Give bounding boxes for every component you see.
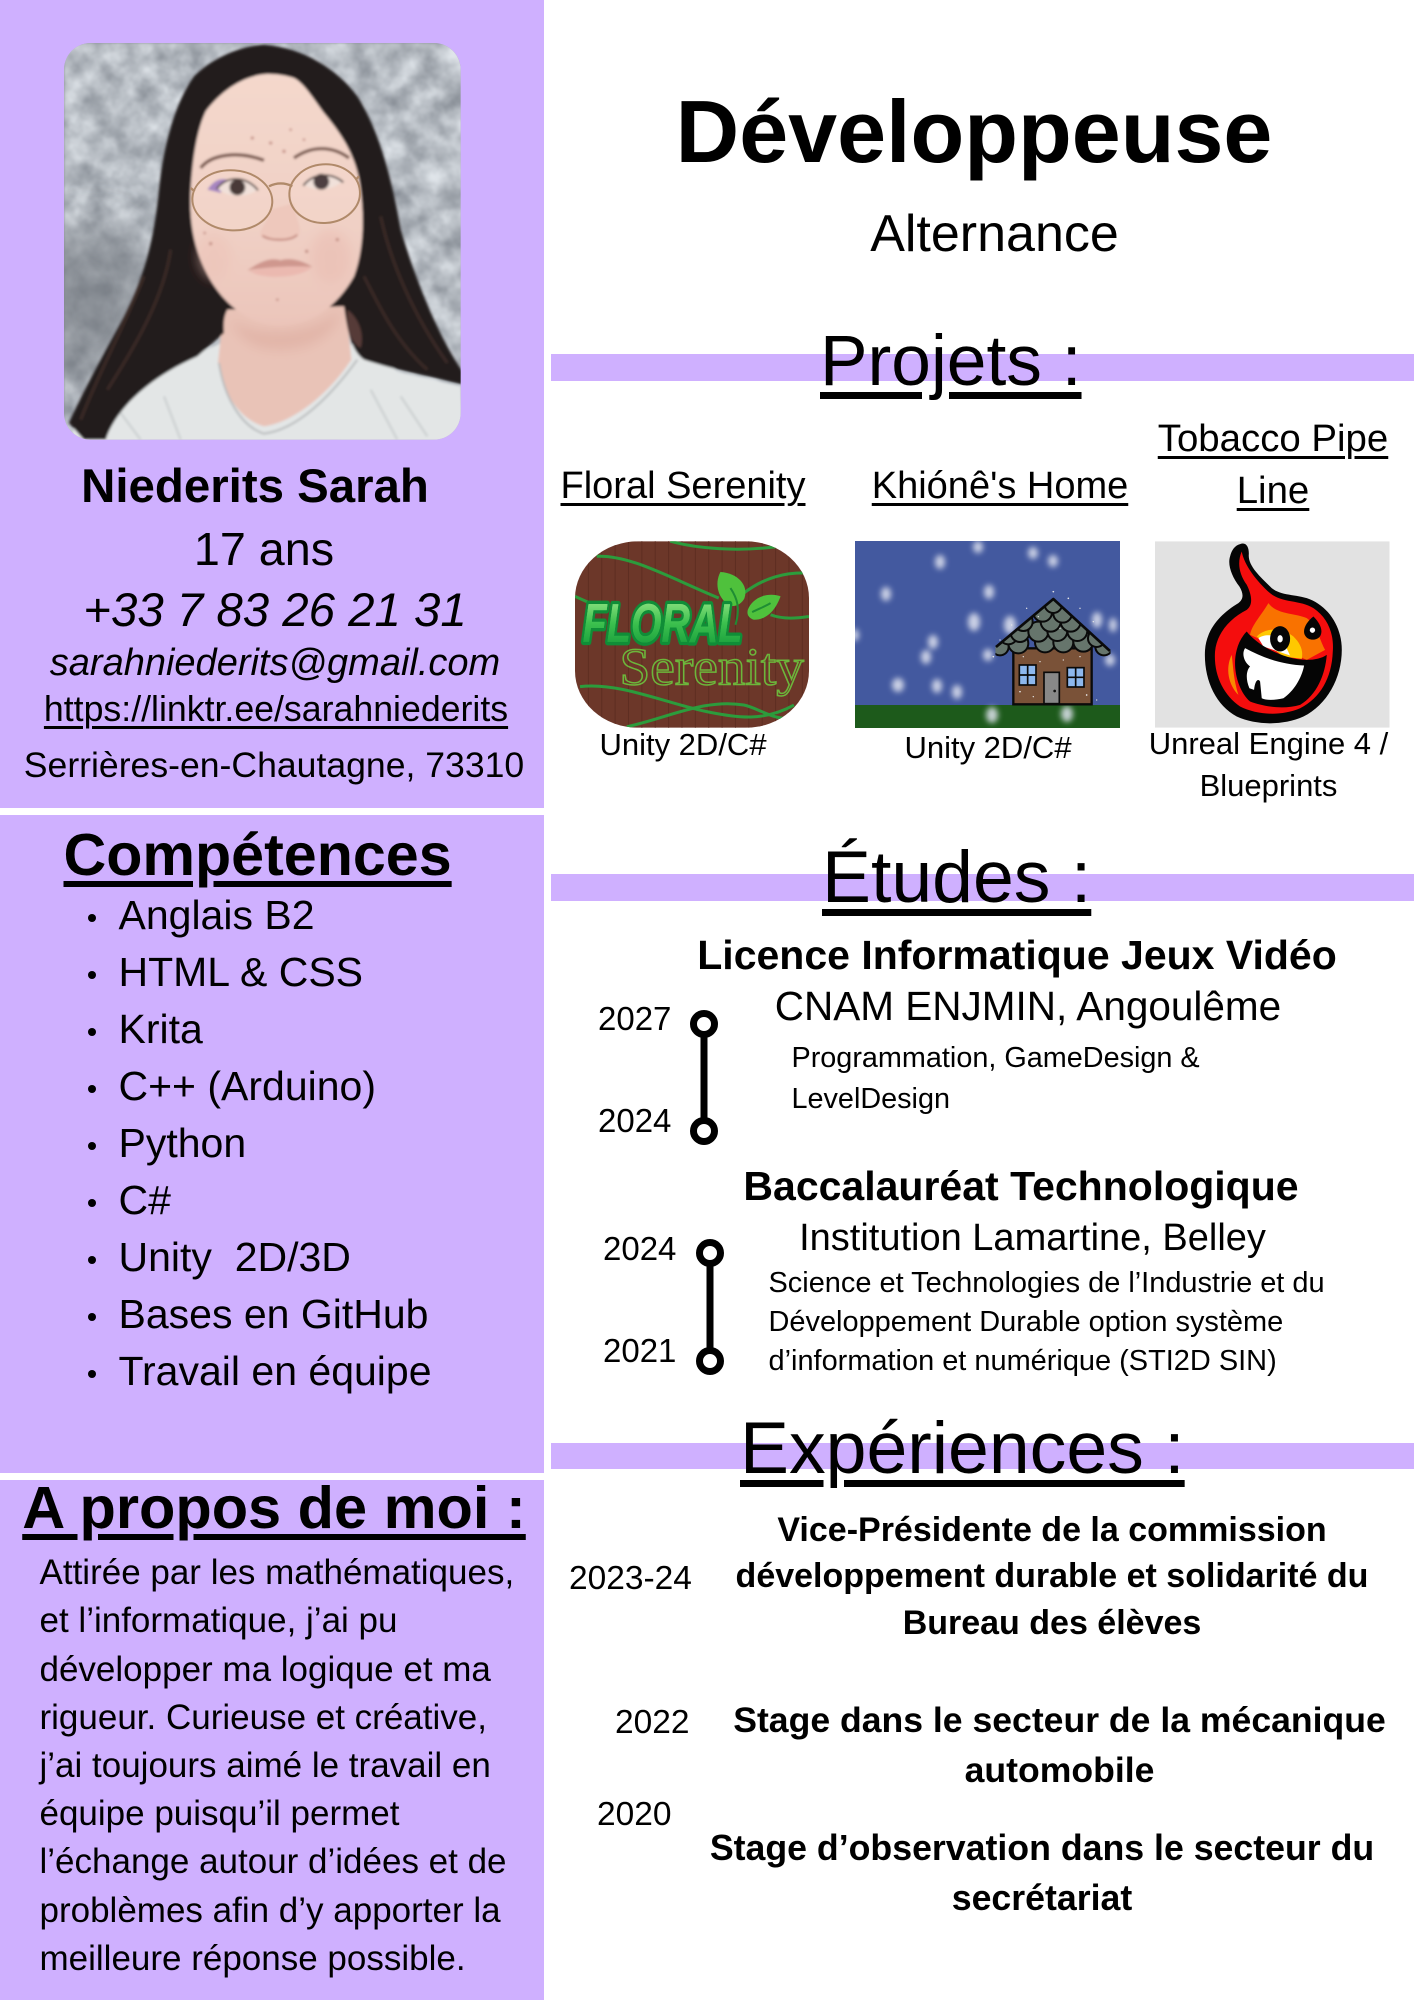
list: skills: C# <box>118 1177 171 1223</box>
experience: vice-presidente: Vice-Présidente de la commission <box>777 1511 1327 1549</box>
text: about: j’ai toujours aimé le travail en <box>40 1746 491 1785</box>
windows <box>1019 665 1084 687</box>
freckles <box>203 128 339 301</box>
header <box>676 82 1272 263</box>
experience: vice-presidente <box>736 1511 1368 1642</box>
section: projects <box>551 321 1414 803</box>
year: 2021: 2021 <box>603 1332 676 1369</box>
address: Serrières-en-Chautagne, 73310 <box>24 745 524 785</box>
text: about: l’échange autour d’idées et de <box>40 1842 507 1881</box>
image: Floral Serenity logo: Serenity <box>619 638 805 696</box>
heading: experiences: Expériences : <box>740 1407 1185 1489</box>
heading: about: A propos de moi : <box>22 1474 526 1541</box>
nose <box>263 206 298 236</box>
year: 2024: 2024 <box>603 1230 676 1267</box>
experience: stage mecanique: automobile <box>965 1750 1154 1790</box>
roof scales <box>995 600 1111 656</box>
list: skills: Krita <box>118 1006 203 1052</box>
title: Développeuse <box>676 82 1272 181</box>
experience: stage mecanique: Stage dans le secteur de la mécanique <box>733 1700 1386 1740</box>
text: about: développer ma logique et ma <box>40 1650 491 1689</box>
subtitle: Alternance <box>870 205 1119 263</box>
chin shadow <box>242 322 331 348</box>
school: CNAM ENJMIN: CNAM ENJMIN, Angoulême <box>775 983 1281 1029</box>
text: about: et l’informatique, j’ai pu <box>40 1601 397 1640</box>
section: studies <box>551 836 1414 1377</box>
year: 2024: 2024 <box>598 1102 671 1139</box>
hair <box>69 45 462 440</box>
mouth <box>247 259 312 270</box>
list: skills: Anglais B2 <box>118 892 315 938</box>
year: 2023-24: 2023-24 <box>569 1560 692 1597</box>
caption: Tobacco Pipe Line engine: Unreal Engine 4 / <box>1149 726 1388 761</box>
email: sarahniederits@gmail.com <box>50 642 500 684</box>
link: https://linktr.ee/sarahniederits <box>44 689 508 729</box>
list: skills: Bases en GitHub <box>118 1291 428 1337</box>
year: 2027: 2027 <box>598 1000 671 1037</box>
degree: licence: Licence Informatique Jeux Vidéo <box>697 932 1337 978</box>
text: about: meilleure réponse possible. <box>40 1939 466 1978</box>
image: Floral Serenity logo <box>575 541 809 728</box>
experience: stage observation <box>710 1828 1374 1918</box>
details: baccalaureat: Développement Durable option système <box>768 1306 1283 1338</box>
details: baccalaureat: Science et Technologies de l’Industrie et du <box>768 1267 1325 1299</box>
caption: Tobacco Pipe Line engine <box>1149 726 1388 803</box>
experience: stage observation: secrétariat <box>952 1878 1132 1918</box>
walls <box>1013 648 1092 704</box>
neck <box>218 303 351 426</box>
project title: Tobacco Pipe Line: Tobacco Pipe <box>1158 417 1388 460</box>
caption: Khione's Home engine: Unity 2D/C# <box>904 730 1072 765</box>
experience: stage observation: Stage d’observation dans le secteur du <box>710 1828 1374 1868</box>
text: about <box>38 1553 514 1978</box>
year: 2022: 2022 <box>615 1704 690 1741</box>
panel: skills <box>0 815 544 1473</box>
list: skills: C++ (Arduino) <box>118 1063 376 1109</box>
list: skills: Travail en équipe <box>118 1348 432 1394</box>
eyebrows <box>201 155 264 168</box>
phone: +33 7 83 26 21 31 <box>83 584 467 637</box>
details: baccalaureat <box>768 1267 1325 1377</box>
experience: vice-presidente: développement durable et solidarité du <box>736 1557 1368 1595</box>
project title: Khione's Home: Khiónê's Home <box>872 465 1128 507</box>
details: licence <box>792 1042 1200 1115</box>
experience: vice-presidente: Bureau des élèves <box>903 1604 1201 1642</box>
image: Floral Serenity logo: FLORAL <box>583 592 742 654</box>
section: experiences <box>551 1407 1414 1918</box>
image: Khione's Home scene <box>855 541 1120 728</box>
shirt <box>71 343 464 443</box>
panel: about <box>0 1480 544 2000</box>
details: licence: LevelDesign <box>792 1083 950 1115</box>
text: about: Attirée par les mathématiques, <box>40 1553 514 1592</box>
panel: profile <box>0 0 544 808</box>
photo: portrait <box>64 43 461 440</box>
text: about: équipe puisqu’il permet <box>40 1794 399 1833</box>
image: Tobacco Pipe Line flame mascot <box>1155 542 1390 728</box>
heading: projects: Projets : <box>820 321 1082 401</box>
cheek shading <box>318 236 344 265</box>
age: 17 ans <box>194 523 334 575</box>
caption: Floral Serenity engine: Unity 2D/C# <box>599 727 767 762</box>
project title: Tobacco Pipe Line <box>1158 417 1388 512</box>
project title: Floral Serenity: Floral Serenity <box>561 465 805 507</box>
image: Floral Serenity logo: FLORAL <box>583 592 742 654</box>
sparkles <box>992 591 1097 701</box>
list: skills <box>88 892 432 1394</box>
eye shadow <box>207 179 227 193</box>
text: about: rigueur. Curieuse et créative, <box>40 1698 487 1737</box>
list: skills: Unity 2D/3D <box>118 1234 351 1280</box>
list: skills: HTML & CSS <box>118 949 363 995</box>
list: skills: Python <box>118 1120 246 1166</box>
details: licence: Programmation, GameDesign & <box>792 1042 1200 1074</box>
details: baccalaureat: d’information et numérique (STI2D SIN) <box>768 1345 1277 1377</box>
degree: baccalaureat: Baccalauréat Technologique <box>743 1163 1299 1209</box>
heading: skills: Compétences <box>64 821 452 888</box>
caption: Tobacco Pipe Line engine: Blueprints <box>1200 768 1337 803</box>
year: 2020: 2020 <box>597 1796 672 1833</box>
face <box>190 74 363 326</box>
experience: stage mecanique <box>733 1700 1386 1790</box>
school: Institution Lamartine: Institution Lamartine, Belley <box>799 1217 1266 1259</box>
timeline: licence <box>690 1010 718 1145</box>
project title: Tobacco Pipe Line: Line <box>1237 469 1309 512</box>
timeline: baccalaureat <box>696 1239 724 1375</box>
glasses <box>190 162 362 233</box>
door <box>1044 672 1059 704</box>
heading: studies: Études : <box>822 836 1091 918</box>
text: about: problèmes afin d’y apporter la <box>40 1891 501 1930</box>
name: Niederits Sarah <box>81 460 429 513</box>
eyes <box>217 180 257 196</box>
